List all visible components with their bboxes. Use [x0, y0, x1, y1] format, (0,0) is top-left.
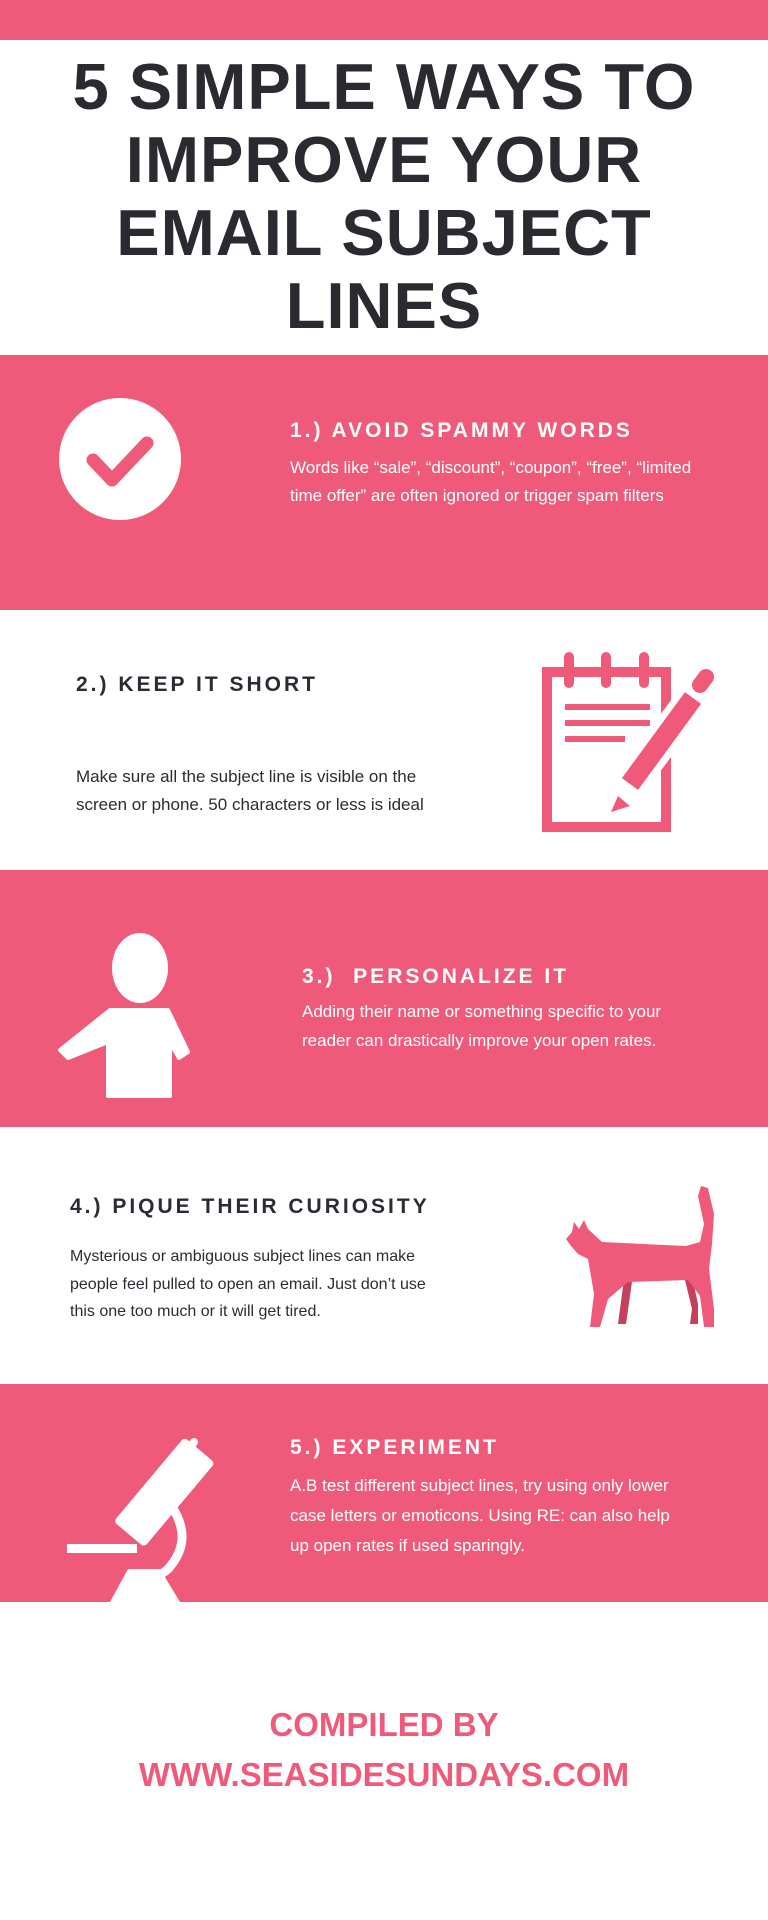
heading: 2.) KEEP IT SHORT	[76, 673, 318, 696]
title: 5 SIMPLE WAYS TO	[73, 50, 695, 123]
title: EMAIL SUBJECT	[116, 196, 652, 269]
footer: compiled by	[138, 1706, 629, 1793]
title: IMPROVE YOUR	[126, 123, 642, 196]
title: LINES	[286, 269, 482, 342]
panel: avoid spammy words	[0, 355, 768, 610]
text: Mysterious or ambiguous subject lines can make people feel pulled to open an email. Just don’t use this one too much or it will get tired.	[70, 1248, 426, 1320]
icon: check circle	[59, 398, 181, 520]
icon: microscope	[67, 1438, 214, 1602]
text: Adding their name or something specific to your reader can drastically improve your open rates.	[302, 1002, 661, 1050]
text: Make sure all the subject line is visible on the screen or phone. 50 characters or less is ideal	[76, 767, 424, 814]
icon: notepad and pencil	[542, 652, 714, 832]
icon: cat	[566, 1186, 714, 1327]
top bar	[0, 0, 768, 40]
title	[73, 50, 695, 342]
heading: 1.) AVOID SPAMMY WORDS	[290, 419, 633, 442]
footer: compiled by: WWW.SEASIDESUNDAYS.COM	[139, 1756, 629, 1793]
panel: pique their curiosity	[70, 1186, 714, 1327]
icon: person	[58, 933, 190, 1098]
text: A.B test different subject lines, try using only lower case letters or emoticons. Using RE: can also help up open rates if used sparingly.	[290, 1476, 670, 1555]
heading: 5.) EXPERIMENT	[290, 1436, 499, 1459]
heading: 4.) PIQUE THEIR CURIOSITY	[70, 1195, 430, 1218]
text: Words like “sale”, “discount”, “coupon”, “free”, “limited time offer” are often ignored or trigger spam filters	[290, 458, 691, 504]
footer: compiled by: COMPILED BY	[269, 1706, 499, 1743]
panel: experiment	[0, 1384, 768, 1602]
panel: keep it short	[76, 652, 714, 832]
heading: 3.) PERSONALIZE IT	[302, 965, 569, 988]
panel: personalize it	[0, 870, 768, 1127]
